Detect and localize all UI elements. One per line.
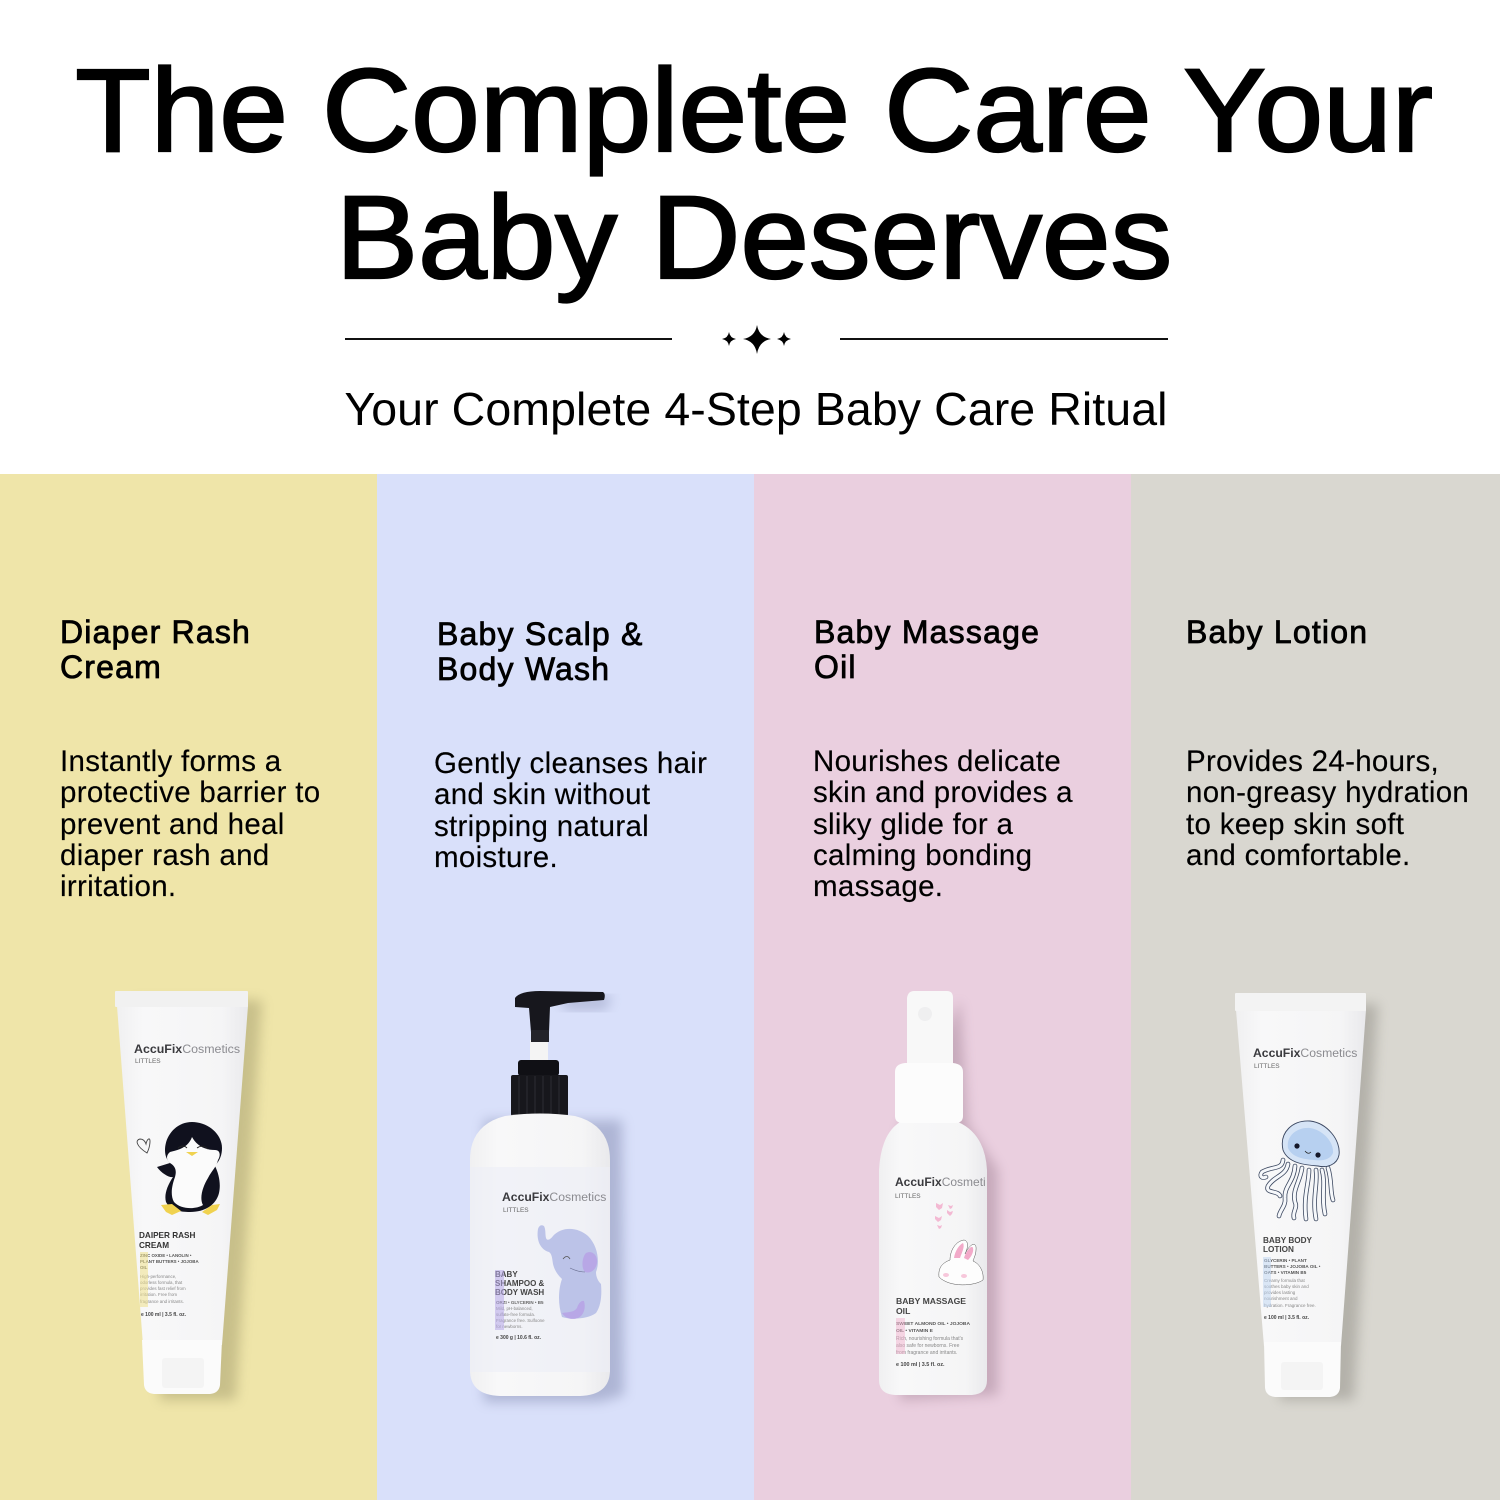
brand label: AccuFixCosmetics: [134, 1042, 240, 1056]
product: baby lotion tube: OATS • VITAMIN B5: [1264, 1270, 1307, 1275]
product: baby lotion tube: nourishment and: [1264, 1296, 1298, 1301]
icon: penguin: [157, 1122, 222, 1215]
text: massage oil description: sliky glide for a: [813, 808, 1013, 841]
product: diaper rash cream tube: fragrance and irritants.: [140, 1299, 184, 1304]
heading: baby scalp and body wash: [437, 616, 644, 687]
panel: baby lotion: [1131, 474, 1500, 1500]
panel: diaper rash cream: [0, 474, 377, 1500]
product: massage oil spray bottle: e 100 ml | 3.5 fl. oz.: [896, 1362, 945, 1368]
title: The Complete Care Your: [75, 45, 1433, 177]
title: [75, 45, 1433, 304]
heading: diaper rash cream: Diaper Rash: [60, 614, 251, 650]
product: diaper rash cream tube: [115, 991, 262, 1400]
panel: baby massage oil: [754, 474, 1131, 1500]
product: massage oil spray bottle: OIL • VITAMIN E: [896, 1328, 934, 1334]
product: baby lotion tube: LITTLES: [1254, 1063, 1280, 1070]
product: massage oil spray bottle: from fragrance and irritants.: [896, 1350, 957, 1356]
product: diaper rash cream tube: CREAM: [139, 1241, 169, 1250]
text: diaper rash cream description: prevent and heal: [60, 808, 285, 841]
product: diaper rash cream tube: provides fast relief from: [140, 1286, 186, 1291]
title: Baby Deserves: [336, 172, 1172, 304]
text: massage oil description: skin and provides a: [813, 776, 1073, 809]
product: diaper rash cream tube: OIL: [140, 1265, 148, 1270]
text: baby lotion description: and comfortable.: [1186, 839, 1411, 872]
product: body wash pump bottle: [470, 991, 624, 1402]
text: baby lotion description: Provides 24-hours,: [1186, 745, 1439, 778]
product: diaper rash cream tube: irritation. Free from: [140, 1292, 177, 1297]
product name: OIL: [896, 1306, 910, 1316]
product: body wash pump bottle: sulfate-free formula.: [496, 1312, 535, 1317]
product name: BABY MASSAGE: [896, 1296, 966, 1306]
icon: heart: [137, 1139, 150, 1153]
product name: BODY WASH: [495, 1288, 544, 1297]
text: massage oil description: Nourishes delicate: [813, 745, 1061, 778]
product: massage oil spray bottle: also safe for newborns. Free: [896, 1343, 960, 1349]
subtitle: Your Complete 4-Step Baby Care Ritual: [344, 383, 1168, 435]
product: massage oil spray bottle: LITTLES: [895, 1193, 921, 1200]
product: baby lotion tube: e 100 ml | 3.5 fl. oz.: [1264, 1315, 1310, 1321]
product: diaper rash cream tube: e 100 ml | 3.5 fl. oz.: [141, 1312, 187, 1318]
product name: BABY: [495, 1270, 518, 1279]
icon: butterflies and bunny: [935, 1203, 983, 1285]
text: body wash description: stripping natural: [434, 810, 649, 843]
product: diaper rash cream tube: High-performance,: [140, 1274, 176, 1279]
heading: baby massage oil: Oil: [814, 649, 857, 685]
product: diaper rash cream tube: odorless formula, that: [140, 1280, 183, 1285]
product: body wash pump bottle: e 300 g | 10.6 fl. oz.: [496, 1335, 542, 1341]
text: diaper rash cream description: protective barrier to: [60, 776, 320, 809]
product: diaper rash cream tube: ZINC OXIDE • LANOLIN •: [140, 1253, 192, 1258]
text: baby lotion description: to keep skin soft: [1186, 808, 1404, 841]
heading: baby scalp and body wash: Baby Scalp &: [437, 616, 644, 652]
text: baby lotion description: [1186, 745, 1469, 872]
text: body wash description: Gently cleanses hair: [434, 747, 707, 780]
product name: SHAMPOO &: [495, 1279, 545, 1288]
product: baby lotion tube: BUTTERS • JOJOBA OIL •: [1264, 1264, 1321, 1269]
brand label: AccuFixCosmetics: [502, 1190, 606, 1204]
product: baby lotion tube: Creamy formula that: [1264, 1278, 1306, 1283]
text: body wash description: moisture.: [434, 841, 558, 874]
panel: baby scalp and body wash: [377, 474, 754, 1500]
divider with sparkles: [345, 325, 1168, 354]
product name: DAIPER RASH: [139, 1231, 195, 1240]
text: diaper rash cream description: Instantly forms a: [60, 745, 282, 778]
icon: jellyfish: [1261, 1121, 1339, 1219]
product: baby lotion tube: hydration. Fragrance free.: [1264, 1303, 1316, 1308]
product: massage oil spray bottle: [879, 991, 998, 1400]
product: diaper rash cream tube: LITTLES: [135, 1058, 161, 1065]
product: baby lotion tube: soothes baby skin and: [1264, 1284, 1309, 1289]
heading: baby massage oil: Baby Massage: [814, 614, 1040, 650]
text: body wash description: [434, 747, 707, 874]
product: body wash pump bottle: Fragrance free. Sulfoone: [496, 1318, 545, 1323]
product name: BABY BODY: [1263, 1236, 1313, 1245]
product name: LOTION: [1263, 1245, 1294, 1254]
product: body wash pump bottle: ORZI • GLYCERIN • B5: [496, 1300, 544, 1305]
text: diaper rash cream description: [60, 745, 320, 903]
product: baby lotion tube: [1235, 993, 1378, 1400]
text: diaper rash cream description: irritation.: [60, 870, 176, 903]
product: body wash pump bottle: for newborns.: [496, 1324, 523, 1329]
icon: elephant: [538, 1225, 601, 1319]
heading: baby scalp and body wash: Body Wash: [437, 651, 610, 687]
text: massage oil description: massage.: [813, 870, 943, 903]
product: baby lotion tube: provides lasting: [1264, 1290, 1296, 1295]
text: massage oil description: calming bonding: [813, 839, 1032, 872]
brand label: AccuFixCosmetics: [1253, 1046, 1357, 1060]
product: body wash pump bottle: LITTLES: [503, 1207, 529, 1214]
product: massage oil spray bottle: SWEET ALMOND OIL • JOJOBA: [896, 1321, 970, 1327]
product: body wash pump bottle: Mild, pH-balanced,: [496, 1306, 533, 1311]
heading: diaper rash cream: Cream: [60, 649, 162, 685]
product: baby lotion tube: GLYCERIN • PLANT: [1264, 1258, 1307, 1263]
text: diaper rash cream description: diaper rash and: [60, 839, 270, 872]
text: body wash description: and skin without: [434, 778, 650, 811]
text: massage oil description: [813, 745, 1073, 903]
product: massage oil spray bottle: Rich, nourishing formula that's: [896, 1336, 964, 1342]
text: baby lotion description: non-greasy hydration: [1186, 776, 1469, 809]
brand label: AccuFixCosmetics: [895, 1175, 998, 1189]
product: diaper rash cream tube: PLANT BUTTERS • JOJOBA: [140, 1259, 199, 1264]
heading: diaper rash cream: [60, 614, 251, 685]
heading: baby lotion: Baby Lotion: [1186, 614, 1368, 650]
heading: baby massage oil: [814, 614, 1040, 685]
